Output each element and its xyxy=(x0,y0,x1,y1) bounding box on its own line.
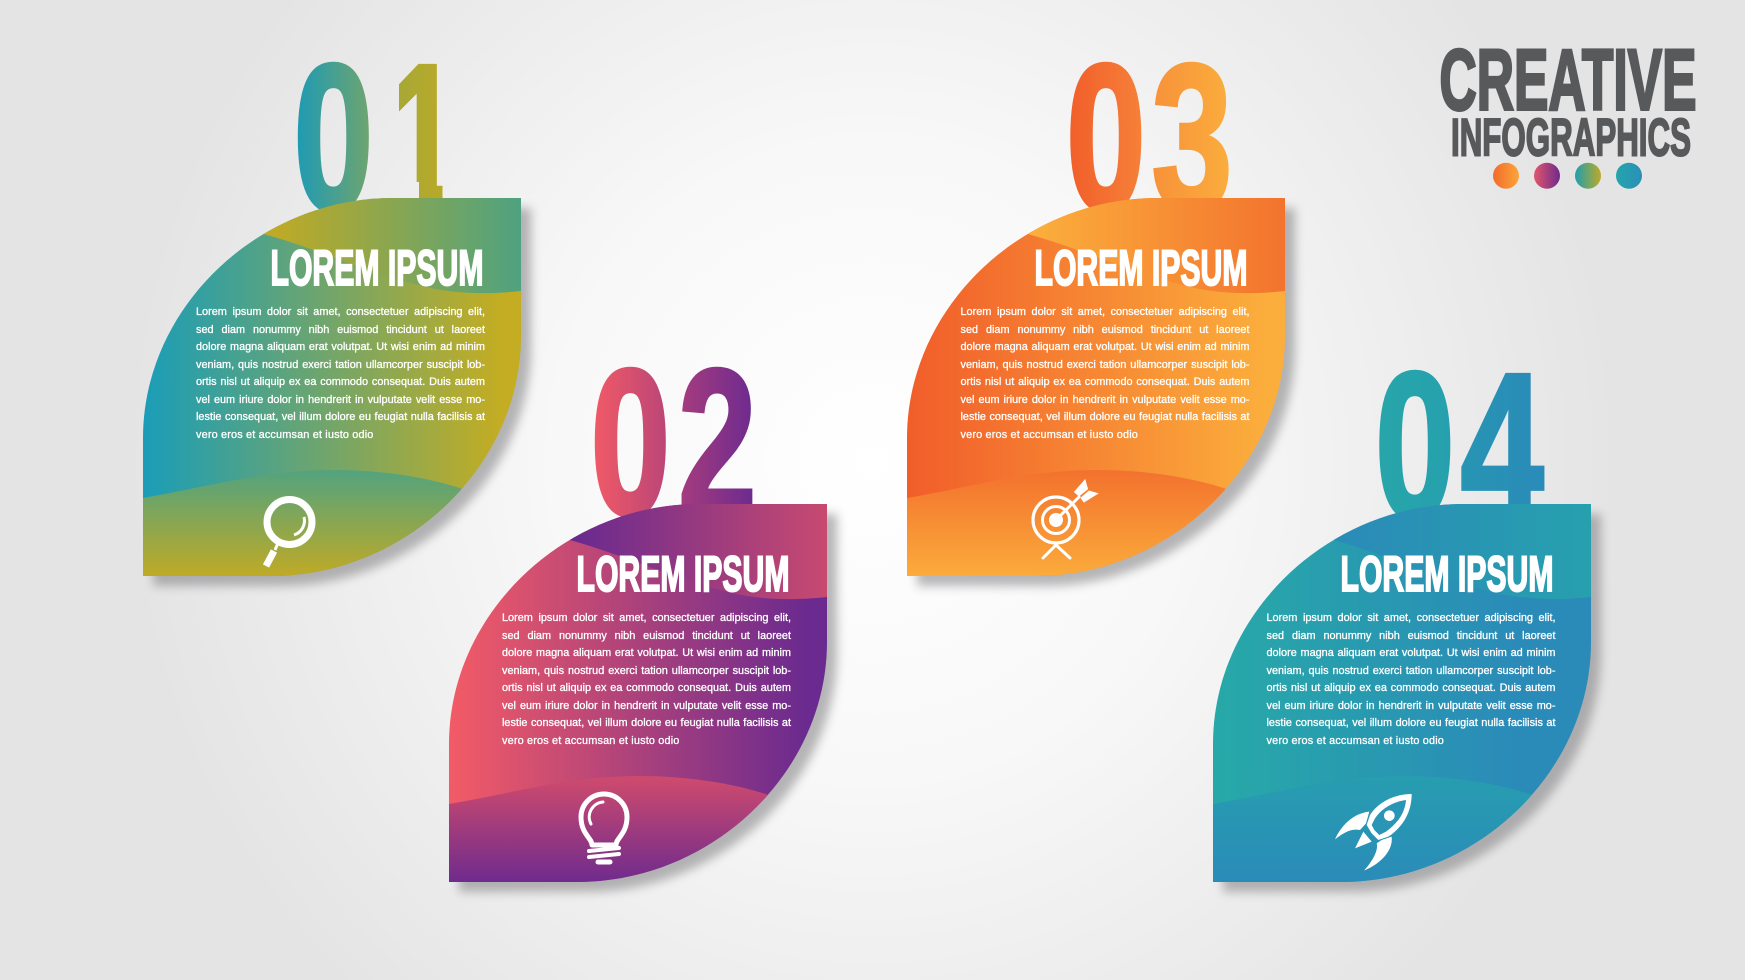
body text: Lorem ipsum dolor sit amet, consectetuer adipiscing elit, xyxy=(1266,612,1556,624)
body text: ortis nisl ut aliquip ex ea commodo consequat. Duis autem xyxy=(960,376,1250,388)
body text: veniam, quis nostrud exerci tation ullamcorper suscipit lob- xyxy=(960,359,1250,371)
heading: LOREM IPSUM xyxy=(1340,545,1554,602)
body text: lestie consequat, vel illum dolore eu feugiat nulla facilisis at xyxy=(502,717,791,729)
body text xyxy=(1266,612,1556,747)
number 02 xyxy=(590,325,756,558)
body text: dolore magna aliquam erat volutpat. Ut wisi enim ad minim xyxy=(960,341,1250,353)
number 03 xyxy=(1066,20,1232,254)
body text: sed diam nonummy nibh euismod tincidunt ut laoreet xyxy=(196,324,485,336)
body text: Lorem ipsum dolor sit amet, consectetuer adipiscing elit, xyxy=(502,612,791,624)
leaf shadow xyxy=(458,514,836,892)
body text: Lorem ipsum dolor sit amet, consectetuer adipiscing elit, xyxy=(196,306,485,318)
body text: dolore magna aliquam erat volutpat. Ut wisi enim ad minim xyxy=(196,341,485,353)
panel: step 01 xyxy=(143,20,1285,882)
number 04: 4 xyxy=(1460,331,1544,563)
icon: light bulb xyxy=(580,794,626,862)
body text: vero eros et accumsan et iusto odio xyxy=(196,429,374,441)
body text: dolore magna aliquam erat volutpat. Ut wisi enim ad minim xyxy=(1266,647,1556,659)
number 01: 1 xyxy=(387,20,459,253)
body text: vel eum iriure dolor in hendrerit in vulputate velit esse mo- xyxy=(1266,700,1556,712)
number 01: 0 xyxy=(293,20,373,253)
body text: dolore magna aliquam erat volutpat. Ut wisi enim ad minim xyxy=(502,647,791,659)
icon: magnifier xyxy=(266,500,312,566)
body text: lestie consequat, vel illum dolore eu feugiat nulla facilisis at xyxy=(1266,717,1556,729)
body text xyxy=(960,306,1250,441)
body text: sed diam nonummy nibh euismod tincidunt ut laoreet xyxy=(960,324,1250,336)
body text: vel eum iriure dolor in hendrerit in vulputate velit esse mo- xyxy=(196,394,485,406)
body text: lestie consequat, vel illum dolore eu feugiat nulla facilisis at xyxy=(960,411,1250,423)
body text: Lorem ipsum dolor sit amet, consectetuer adipiscing elit, xyxy=(960,306,1250,318)
number 03: 3 xyxy=(1152,21,1232,254)
body text: vero eros et accumsan et iusto odio xyxy=(502,735,680,747)
leaf background xyxy=(1213,504,1591,882)
number 01 xyxy=(298,62,442,210)
number 02: 0 xyxy=(590,325,670,558)
logo dots xyxy=(1493,163,1642,189)
body text: veniam, quis nostrud exerci tation ullamcorper suscipit lob- xyxy=(502,665,791,677)
body text xyxy=(502,612,792,747)
body text: vel eum iriure dolor in hendrerit in vulputate velit esse mo- xyxy=(960,394,1250,406)
panel: step 04 xyxy=(1213,328,1606,898)
leaf background xyxy=(142,198,520,576)
body text: lestie consequat, vel illum dolore eu feugiat nulla facilisis at xyxy=(196,411,485,423)
body text: vero eros et accumsan et iusto odio xyxy=(960,429,1138,441)
body text xyxy=(196,306,486,441)
icon: target with arrow xyxy=(1033,480,1098,558)
number 03: 0 xyxy=(1066,20,1146,253)
heading: LOREM IPSUM xyxy=(270,239,483,296)
body text: vel eum iriure dolor in hendrerit in vulputate velit esse mo- xyxy=(502,700,791,712)
leaf background xyxy=(448,504,826,882)
body text: sed diam nonummy nibh euismod tincidunt ut laoreet xyxy=(1266,630,1556,642)
number 04: 0 xyxy=(1375,328,1455,561)
number 04 xyxy=(1375,328,1544,563)
body text: ortis nisl ut aliquip ex ea commodo consequat. Duis autem xyxy=(502,682,791,694)
body text: veniam, quis nostrud exerci tation ullamcorper suscipit lob- xyxy=(196,359,485,371)
number 02: 2 xyxy=(678,326,756,558)
leaf shadow xyxy=(1223,514,1601,892)
heading: LOREM IPSUM xyxy=(576,545,789,602)
leaf shadow xyxy=(917,208,1295,586)
icon: rocket xyxy=(1335,794,1412,871)
panel: step 03 xyxy=(907,20,1300,592)
leaf shadow xyxy=(152,208,530,586)
body text: ortis nisl ut aliquip ex ea commodo consequat. Duis autem xyxy=(1266,682,1556,694)
leaf background xyxy=(907,198,1285,576)
heading: LOREM IPSUM xyxy=(1034,239,1248,296)
panel: step 02 xyxy=(449,74,1285,898)
body text: sed diam nonummy nibh euismod tincidunt ut laoreet xyxy=(502,630,791,642)
body text: vero eros et accumsan et iusto odio xyxy=(1266,735,1444,747)
body text: veniam, quis nostrud exerci tation ullamcorper suscipit lob- xyxy=(1266,665,1556,677)
body text: ortis nisl ut aliquip ex ea commodo consequat. Duis autem xyxy=(196,376,485,388)
